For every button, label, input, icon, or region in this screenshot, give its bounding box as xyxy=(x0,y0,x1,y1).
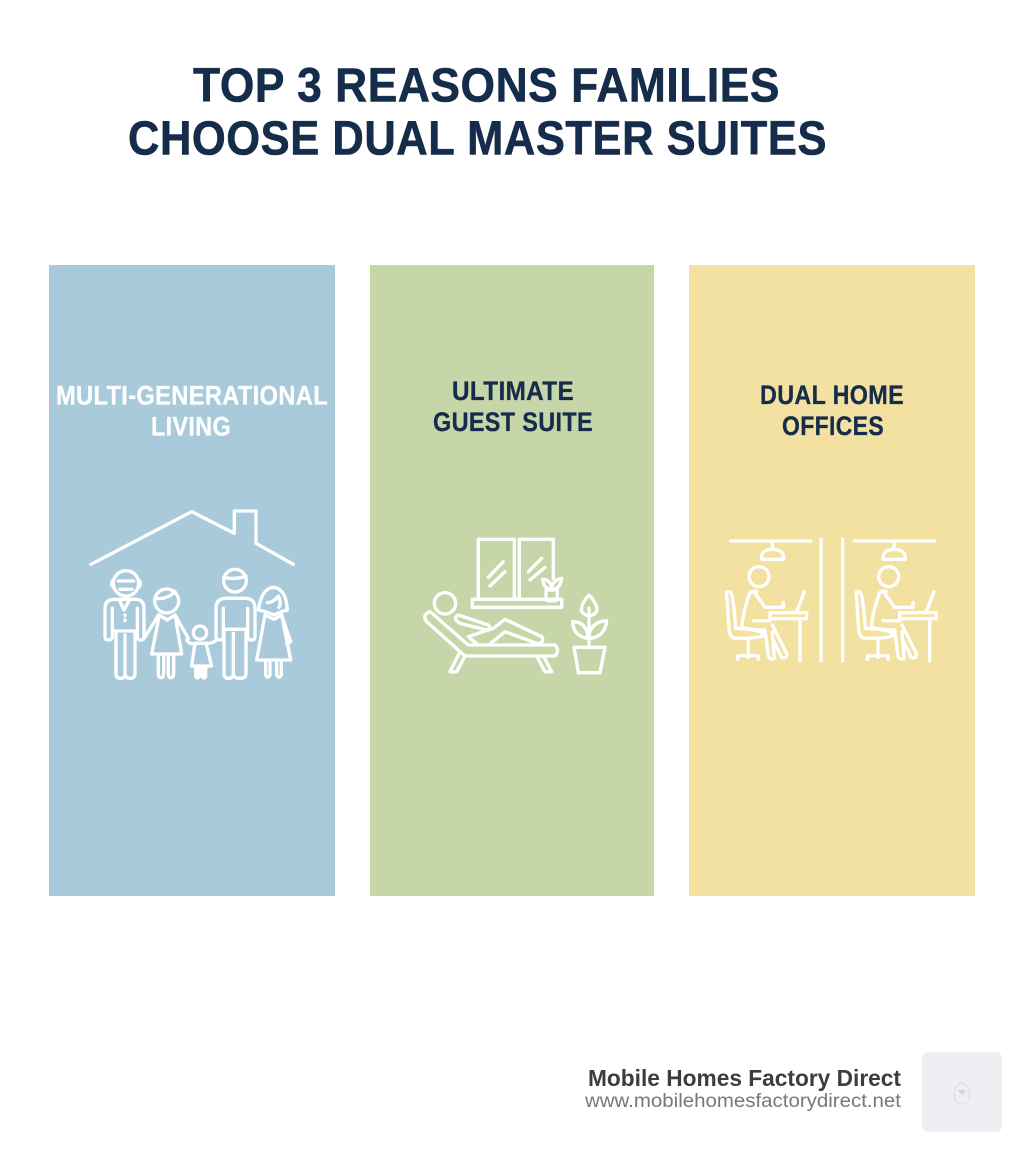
heading: multi-generational living: MULTI-GENERATIONAL xyxy=(56,380,328,410)
heading: ultimate guest suite xyxy=(433,376,593,437)
heading: ultimate guest suite: GUEST SUITE xyxy=(433,407,593,437)
heading: multi-generational living: LIVING xyxy=(151,412,231,442)
icon: two people working at desks xyxy=(726,539,936,661)
heading: multi-generational living xyxy=(56,380,328,442)
heading: dual home offices: OFFICES xyxy=(782,411,884,441)
heading: ultimate guest suite: ULTIMATE xyxy=(452,376,574,406)
icon: family under a roof xyxy=(91,511,293,678)
heading: dual home offices xyxy=(760,380,904,441)
title: TOP 3 REASONS FAMILIES xyxy=(193,60,780,112)
title: CHOOSE DUAL MASTER SUITES xyxy=(128,112,827,166)
panel background: yellow xyxy=(689,265,975,896)
footer brand text: Mobile Homes Factory Direct xyxy=(588,1065,901,1091)
title xyxy=(128,60,827,166)
footer logo placeholder xyxy=(922,1052,1002,1132)
footer brand text: www.mobilehomesfactorydirect.net xyxy=(584,1091,902,1112)
heading: dual home offices: DUAL HOME xyxy=(760,380,904,410)
panel background: green xyxy=(370,265,654,896)
icon: person relaxing on lounger by window with plants xyxy=(425,539,607,673)
footer brand text xyxy=(584,1065,902,1112)
panel: dual home offices xyxy=(689,265,975,896)
panel: ultimate guest suite xyxy=(370,265,654,896)
panel: multi-generational living xyxy=(49,265,335,896)
panel background: blue xyxy=(49,265,335,896)
